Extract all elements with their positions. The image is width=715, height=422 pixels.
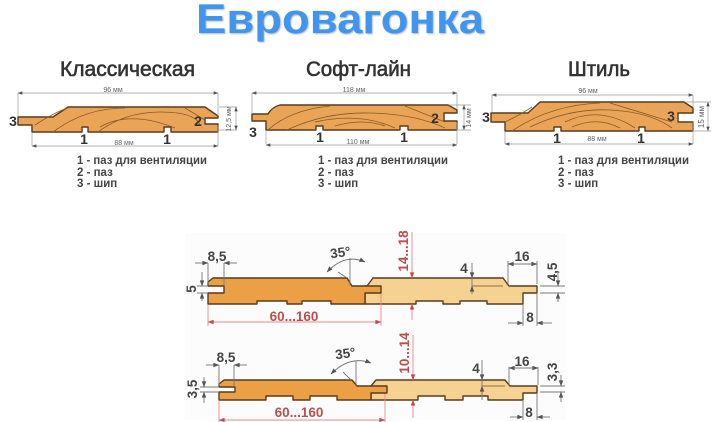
- legend: 1 - паз для вентиляции: [77, 155, 207, 167]
- red dimensions: [208, 230, 412, 326]
- panel: Софт-лайн: [249, 58, 473, 190]
- callout numbers: 1: [553, 130, 561, 146]
- callout numbers: 1: [637, 130, 645, 146]
- angle dimension: [331, 345, 371, 385]
- heading: Классическая: Классическая: [60, 58, 195, 81]
- red dimensions: 60...160: [270, 309, 318, 324]
- orange board: [219, 380, 387, 400]
- dimensions: 15 мм: [697, 106, 706, 128]
- light board: [365, 278, 537, 304]
- right dimensions: 4: [472, 361, 480, 376]
- callout numbers: 2: [431, 110, 439, 126]
- callout numbers: [249, 110, 439, 145]
- right dimensions: [460, 249, 565, 326]
- dimensions: [252, 87, 473, 146]
- heading: Штиль: Штиль: [568, 58, 630, 81]
- dimensions: 88 мм: [587, 136, 607, 143]
- right dimensions: 3,3: [545, 362, 560, 381]
- board profile: Софт-лайн: [252, 105, 457, 130]
- dimensions: 96 мм: [103, 87, 123, 94]
- right dimensions: 16: [514, 354, 530, 369]
- red dimensions: 10...14: [397, 332, 412, 374]
- legend: 2 - паз: [558, 167, 594, 179]
- red dimensions: [219, 332, 413, 422]
- right dimensions: 4: [460, 261, 468, 276]
- right dimensions: [472, 354, 565, 420]
- left dimensions: 5: [184, 285, 199, 293]
- dimensions: [18, 87, 237, 147]
- dimensions: 14 мм: [466, 108, 473, 128]
- right dimensions: 8: [525, 405, 533, 420]
- left dimensions: 8,5: [208, 249, 227, 264]
- right dimensions: 8: [526, 310, 534, 325]
- angle dimension: 35°: [329, 244, 352, 261]
- legend: 3 - шип: [558, 178, 598, 190]
- heading: Софт-лайн: Софт-лайн: [306, 58, 411, 81]
- callout numbers: 3: [667, 108, 675, 124]
- board profile: Штиль: [491, 102, 693, 131]
- callout numbers: 3: [249, 124, 257, 140]
- right dimensions: 16: [514, 249, 530, 264]
- panel: technical drawings: [184, 230, 566, 422]
- callout numbers: 1: [163, 131, 171, 147]
- panel: Классическая: [9, 58, 237, 190]
- legend: 2 - паз: [318, 167, 354, 179]
- legend: 2 - паз: [77, 167, 113, 179]
- legend: 3 - шип: [77, 178, 117, 190]
- drawing: upper joint: [184, 230, 565, 326]
- callout numbers: 2: [194, 113, 202, 129]
- angle dimension: 35°: [334, 345, 357, 362]
- dimensions: 110 мм: [347, 139, 370, 146]
- left dimensions: [184, 249, 237, 301]
- right dimensions: 4,5: [545, 262, 560, 281]
- callout numbers: 3: [9, 113, 17, 129]
- dimensions: [492, 88, 711, 144]
- board profile: Классическая: [18, 107, 218, 132]
- callout numbers: 3: [482, 109, 490, 125]
- left dimensions: 3,5: [185, 379, 200, 398]
- dimensions: 88 мм: [114, 140, 134, 147]
- legend: 1 - паз для вентиляции: [318, 155, 448, 167]
- legend: 1 - паз для вентиляции: [558, 155, 689, 167]
- callout numbers: 1: [400, 129, 408, 145]
- legend: [77, 155, 207, 190]
- callout numbers: [482, 108, 675, 146]
- dimensions: 12,5 мм: [226, 106, 233, 132]
- callout numbers: 1: [316, 129, 324, 145]
- left dimensions: 8,5: [217, 350, 236, 365]
- dimensions: 118 мм: [343, 87, 366, 94]
- legend: [558, 155, 689, 190]
- drawing: lower joint: [185, 332, 565, 422]
- light board: [371, 380, 537, 400]
- angle dimension: [327, 244, 365, 285]
- orange board: [208, 278, 381, 304]
- legend: [318, 155, 448, 190]
- legend: 3 - шип: [318, 178, 358, 190]
- dimensions: 96 мм: [578, 88, 598, 95]
- panel: Штиль: [482, 58, 711, 190]
- left dimensions: [185, 350, 247, 403]
- red dimensions: 60...160: [275, 405, 323, 420]
- callout numbers: [9, 113, 202, 147]
- callout numbers: 1: [80, 131, 88, 147]
- red dimensions: 14...18: [396, 230, 411, 272]
